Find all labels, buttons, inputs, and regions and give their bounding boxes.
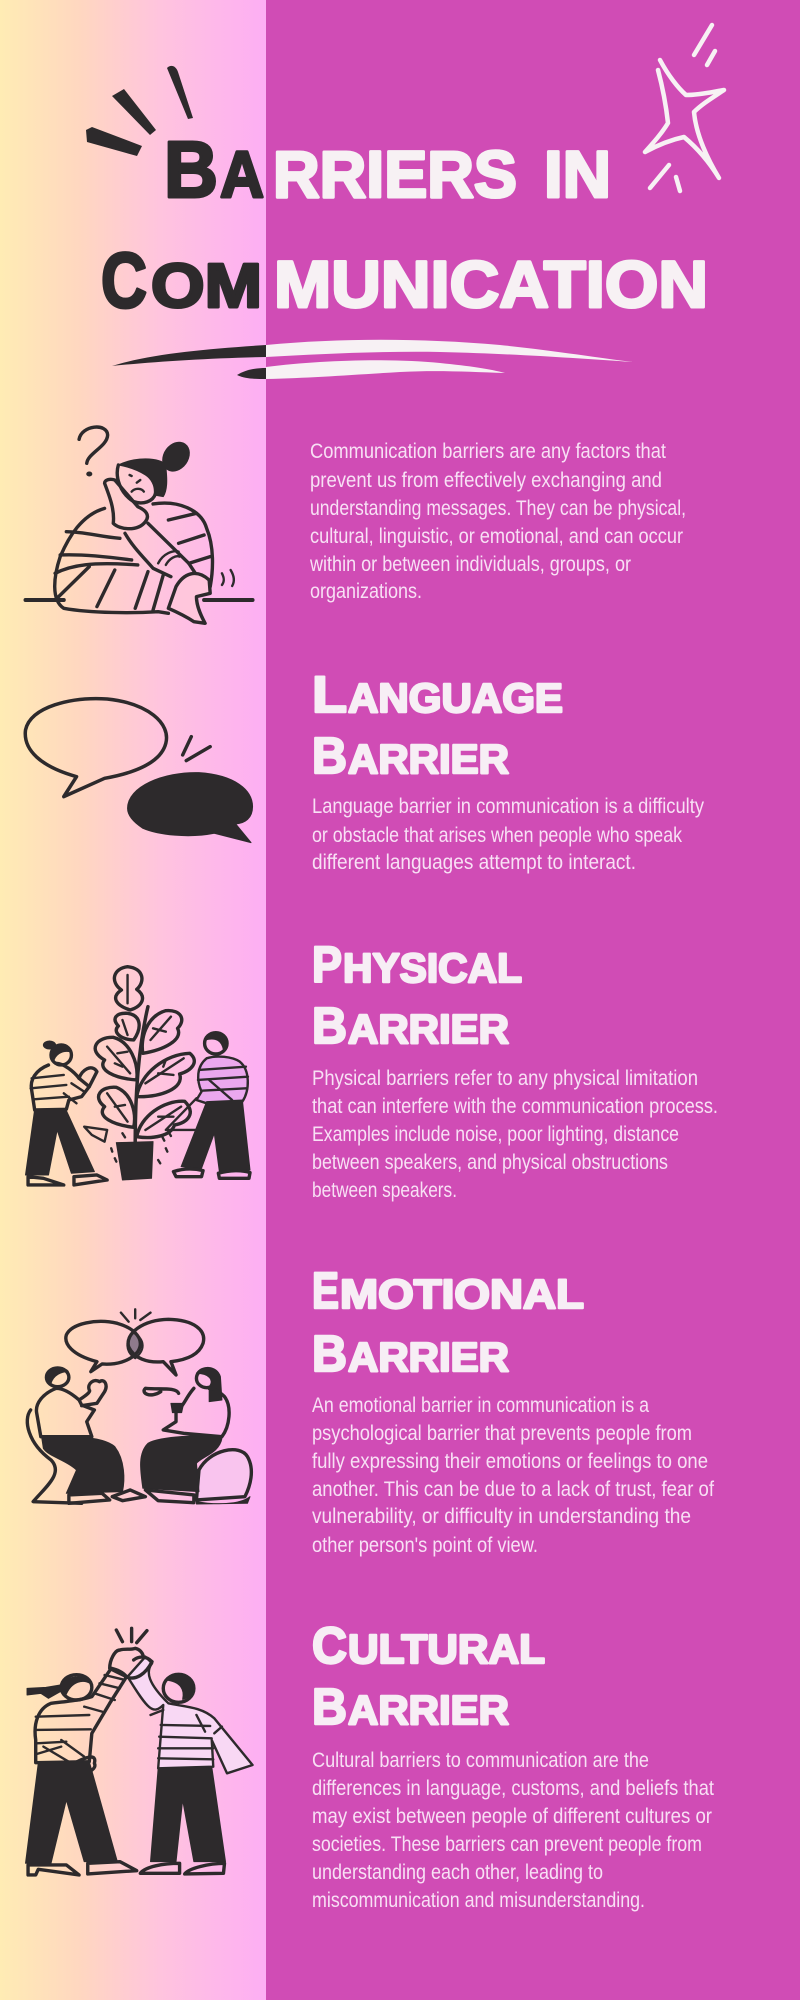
text block: introduction: [309, 440, 686, 603]
text block: emotional barrier: [312, 1394, 714, 1557]
overlapping speech bubbles: [66, 1309, 204, 1375]
head and hair: [117, 441, 193, 503]
title line 1: A: [220, 137, 264, 211]
icon: thinking person: [26, 427, 253, 623]
text block: introduction: prevent us from effectively exchanging and: [310, 469, 662, 492]
heading: language barrier: ARRIER: [348, 736, 509, 782]
filled bubble: [128, 773, 253, 843]
heading: language barrier: B: [312, 727, 347, 784]
text block: emotional barrier: vulnerability, or difficulty in understanding the: [312, 1505, 691, 1528]
text block: physical barrier: between speakers, and physical obstructions: [312, 1151, 668, 1174]
icon: two people watering a plant: [26, 967, 250, 1185]
icon: two people talking with overlapping bubbles: [27, 1309, 251, 1504]
text block: cultural barrier: Cultural barriers to communication are the: [312, 1749, 649, 1772]
right person: [141, 1367, 251, 1504]
ground and hand: [26, 570, 253, 623]
text block: language barrier: different languages attempt to interact.: [312, 851, 636, 874]
title line 1: B: [164, 125, 218, 214]
icon: speech bubbles: [25, 699, 253, 843]
text block: physical barrier: [312, 1067, 718, 1202]
outlined bubble: [25, 699, 167, 797]
question mark: [79, 427, 108, 463]
emphasis marks: [183, 737, 210, 761]
plant: [95, 967, 194, 1142]
heading: cultural barrier: C: [312, 1617, 347, 1674]
text block: introduction: cultural, linguistic, or emotional, and can occur: [310, 525, 683, 548]
text block: introduction: organizations.: [310, 580, 422, 603]
text block: physical barrier: that can interfere with the communication process.: [312, 1095, 718, 1118]
heading: cultural barrier: ULTURAL: [348, 1626, 545, 1672]
heading: cultural barrier: B: [312, 1678, 347, 1735]
text block: language barrier: Language barrier in communication is a difficulty: [312, 795, 704, 818]
heading: physical barrier: B: [312, 997, 347, 1054]
text block: cultural barrier: differences in language, customs, and beliefs that: [312, 1777, 714, 1800]
title line 1: RRIERS: [273, 137, 517, 211]
heading: physical barrier: P: [312, 936, 342, 993]
text block: emotional barrier: fully expressing their emotions or feelings to one: [312, 1450, 708, 1473]
heading: language barrier: ANGUAGE: [348, 675, 563, 721]
text block: cultural barrier: understanding each other, leading to: [312, 1861, 603, 1884]
text block: cultural barrier: miscommunication and misunderstanding.: [312, 1889, 645, 1912]
left person: [26, 1648, 144, 1875]
text block: language barrier: or obstacle that arises when people who speak: [312, 824, 682, 847]
panel: right magenta column: [266, 0, 800, 2000]
right person: [166, 1032, 250, 1178]
pot: [116, 1142, 153, 1180]
text block: cultural barrier: societies. These barriers can prevent people from: [312, 1833, 702, 1856]
water drops: [111, 1132, 171, 1163]
icon: white sparkle star: [645, 25, 724, 191]
left person: [27, 1368, 145, 1503]
text block: physical barrier: between speakers.: [312, 1179, 457, 1202]
left person: [26, 1041, 107, 1185]
heading: physical barrier: HYSICAL: [343, 945, 522, 991]
text block: emotional barrier: another. This can be due to a lack of trust, fear of: [312, 1478, 714, 1501]
title line 2: C: [101, 236, 147, 324]
title underline brush strokes: [112, 340, 633, 379]
right person: [128, 1657, 253, 1874]
icon: dark burst marks: [86, 66, 193, 156]
heading: emotional barrier: E: [312, 1262, 339, 1319]
text block: emotional barrier: An emotional barrier in communication is a: [312, 1394, 649, 1417]
heading: physical barrier: ARRIER: [348, 1006, 509, 1052]
text block: introduction: Communication barriers are any factors that: [310, 440, 666, 463]
text block: emotional barrier: psychological barrier that prevents people from: [312, 1422, 692, 1445]
text block: introduction: within or between individuals, groups, or: [309, 553, 631, 576]
text block: physical barrier: Physical barriers refer to any physical limitation: [312, 1067, 698, 1090]
heading: emotional barrier: MOTIONAL: [340, 1271, 584, 1317]
person body: [55, 479, 212, 613]
spark lines: [116, 1628, 147, 1643]
icon: two people high five: [26, 1628, 253, 1875]
title line 2: OM: [151, 252, 262, 321]
text block: cultural barrier: may exist between people of different cultures or: [312, 1805, 712, 1828]
heading: emotional barrier: B: [312, 1325, 347, 1382]
title line 2: MUNICATION: [274, 247, 708, 321]
title line 1: IN: [544, 137, 611, 211]
text block: cultural barrier: [312, 1749, 714, 1912]
panel: left gradient column: [0, 0, 266, 2000]
heading: cultural barrier: ARRIER: [348, 1687, 509, 1733]
text block: language barrier: [312, 795, 704, 874]
text block: physical barrier: Examples include noise, poor lighting, distance: [312, 1123, 679, 1146]
heading: language barrier: L: [312, 666, 347, 723]
text block: emotional barrier: other person's point of view.: [312, 1534, 538, 1557]
text block: introduction: understanding messages. They can be physical,: [310, 497, 686, 520]
title: [101, 125, 708, 324]
heading: emotional barrier: ARRIER: [348, 1334, 509, 1380]
